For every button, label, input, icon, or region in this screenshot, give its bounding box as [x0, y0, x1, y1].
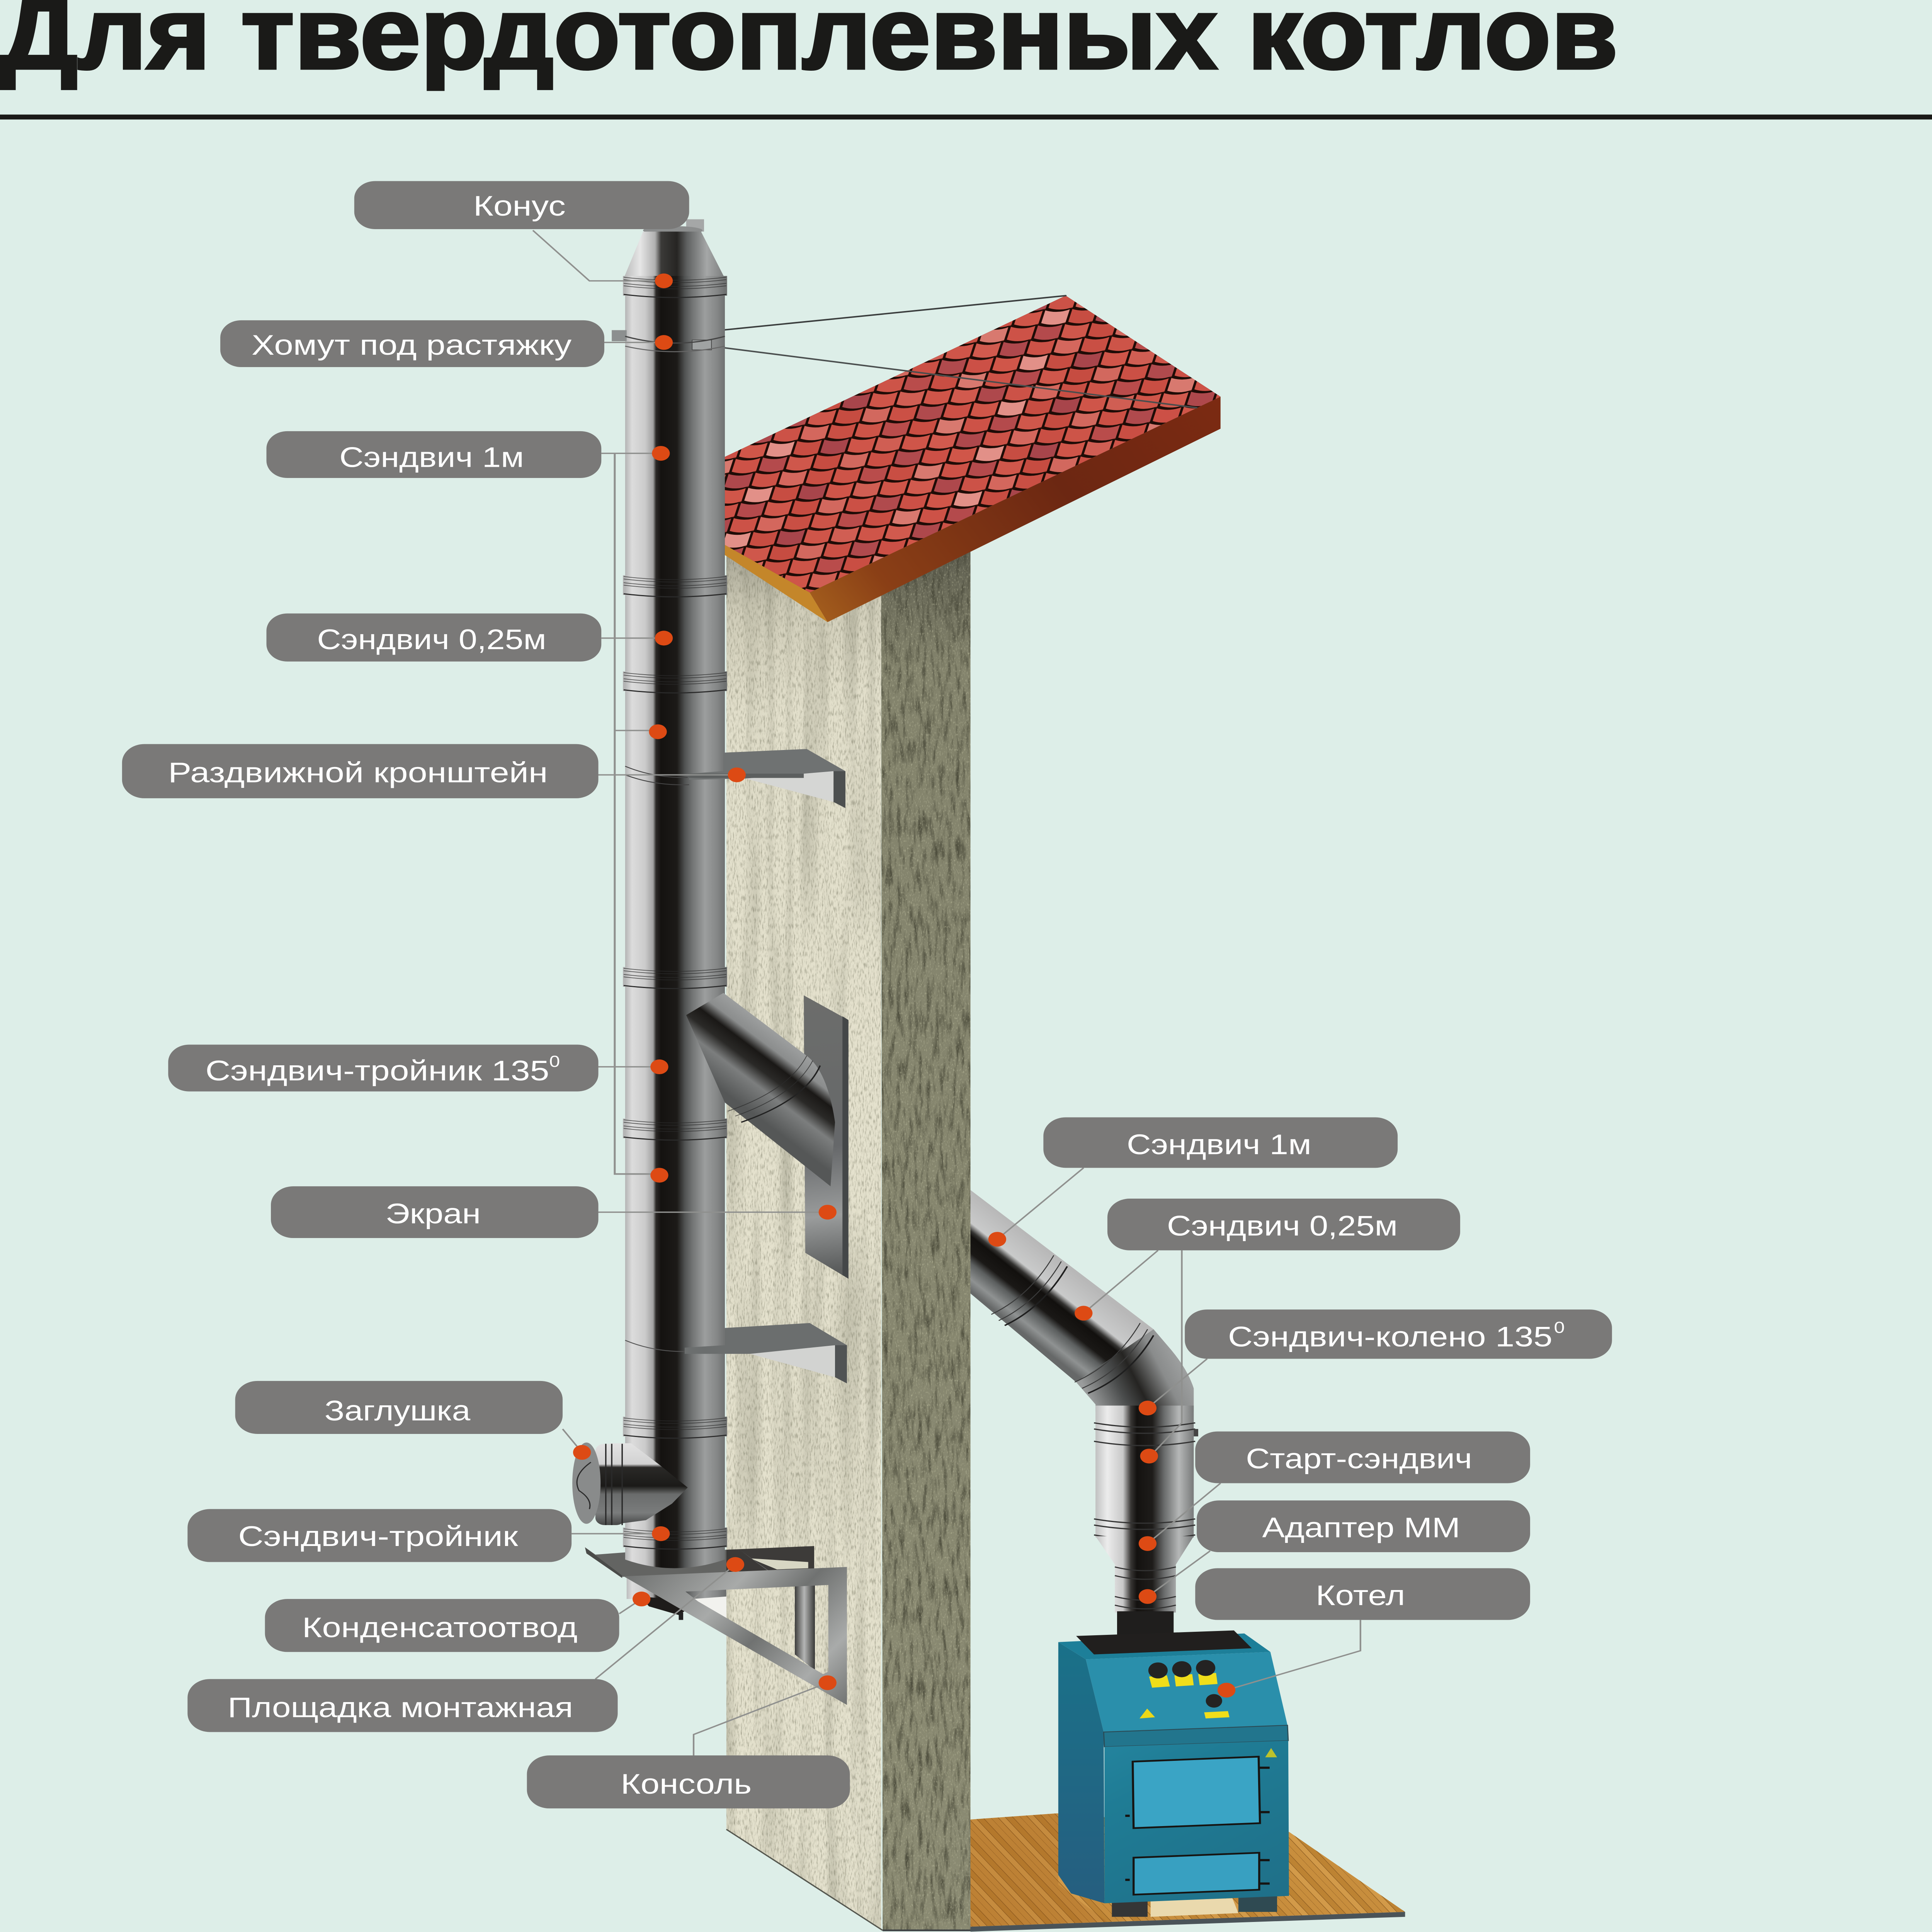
- label: Котел: [1195, 1568, 1530, 1620]
- side face: [1058, 1642, 1104, 1903]
- label: Заглушка: [235, 1381, 563, 1434]
- label: Старт-сэндвич: [1195, 1432, 1530, 1483]
- console: [624, 1567, 847, 1705]
- flue to boiler: [971, 1190, 1198, 1636]
- label: Хомут под растяжку: Хомут под растяжку: [252, 329, 572, 361]
- end cap tee branch: [572, 1442, 688, 1525]
- label: Сэндвич 1м: Сэндвич 1м: [339, 441, 524, 473]
- label: Экран: [271, 1186, 599, 1238]
- lower bracket collar: [625, 1340, 689, 1352]
- label: Хомут под растяжку: [220, 320, 604, 367]
- roof: [725, 296, 1221, 622]
- label: Раздвижной кронштейн: Раздвижной кронштейн: [168, 757, 548, 789]
- label: Сэндвич 1м right: Сэндвич 1м: [1127, 1129, 1311, 1160]
- label: Сэндвич 0,25м right: Сэндвич 0,25м: [1167, 1210, 1398, 1242]
- branch of tee 135: [686, 993, 835, 1186]
- yellow plates: [1149, 1673, 1230, 1718]
- control knobs: [1148, 1660, 1222, 1708]
- roof edge: [810, 397, 1221, 622]
- label: Конденсатоотвод: [265, 1599, 619, 1652]
- back plate of console: [726, 1546, 815, 1670]
- warning triangles: [1139, 1709, 1277, 1757]
- label: Сэндвич-тройник 135°: 0: [549, 1052, 560, 1070]
- label: Сэндвич-тройник 135°: [168, 1045, 599, 1092]
- label: Раздвижной кронштейн: [122, 744, 599, 798]
- ring joints: [623, 276, 727, 1549]
- label: Экран: Экран: [386, 1198, 481, 1230]
- lower tube: [1115, 1563, 1176, 1612]
- drain collar: [627, 1571, 726, 1624]
- upper panel: [1086, 1652, 1287, 1732]
- diagonal rings: [991, 1255, 1061, 1321]
- black stub: [1117, 1611, 1173, 1636]
- lower front: [1104, 1741, 1289, 1903]
- wall screen plate: [804, 995, 849, 1279]
- adapter: [1095, 1536, 1194, 1565]
- feet: [1112, 1897, 1148, 1917]
- cone: [624, 231, 725, 279]
- roof end: [722, 543, 828, 622]
- label: Старт-сэндвич: Старт-сэндвич: [1246, 1443, 1472, 1475]
- rim: [595, 1444, 625, 1525]
- floor: [971, 1813, 1405, 1932]
- mounting platform: [585, 1547, 774, 1578]
- band: [1104, 1725, 1288, 1747]
- label: Консоль: Консоль: [621, 1768, 752, 1800]
- label: Сэндвич 1м: [267, 431, 601, 478]
- elbow: [1076, 1329, 1194, 1412]
- label: Конус: [354, 181, 689, 229]
- roof tiles: [725, 296, 1221, 593]
- pipe body: [625, 279, 725, 1568]
- cap: [572, 1442, 600, 1524]
- door handles: [1125, 1768, 1270, 1884]
- wall bracket upper: [688, 749, 845, 808]
- label: Котел: Котел: [1316, 1580, 1405, 1611]
- label: Площадка монтажная: [187, 1679, 618, 1732]
- label: Адаптер ММ: [1197, 1500, 1530, 1552]
- label: Сэндвич 0,25м right: [1107, 1199, 1460, 1250]
- wall bracket lower: [685, 1323, 847, 1383]
- stay wires: [711, 296, 1197, 408]
- label: Сэндвич-колено 135°: Сэндвич-колено 135: [1228, 1321, 1553, 1353]
- title rule: [0, 114, 1932, 119]
- vertical section: [1095, 1406, 1194, 1537]
- branch: [609, 1443, 688, 1525]
- lower door: [1134, 1853, 1259, 1895]
- top: [1058, 1633, 1270, 1659]
- label: Конденсатоотвод: Конденсатоотвод: [302, 1612, 578, 1643]
- leader lines: [533, 230, 1361, 1755]
- label: Консоль: [527, 1755, 850, 1808]
- upper door: [1133, 1757, 1260, 1828]
- main pipe: [612, 219, 727, 1568]
- label: Сэндвич 1м right: [1043, 1117, 1398, 1168]
- label: Сэндвич-колено 135°: 0: [1554, 1318, 1565, 1337]
- label: Сэндвич-тройник: Сэндвич-тройник: [238, 1520, 518, 1552]
- label: Сэндвич-тройник: [187, 1509, 571, 1562]
- label: Сэндвич-колено 135°: [1185, 1310, 1612, 1359]
- concrete wall: [726, 542, 971, 1930]
- cone cap: [643, 219, 704, 235]
- top plate: [1076, 1630, 1252, 1655]
- label: Сэндвич-тройник 135°: Сэндвич-тройник 135: [206, 1055, 549, 1087]
- label: Площадка монтажная: Площадка монтажная: [228, 1692, 573, 1723]
- bracket collar: [625, 766, 689, 785]
- label: Конус: Конус: [473, 190, 566, 222]
- label: Адаптер ММ: Адаптер ММ: [1262, 1512, 1460, 1544]
- boiler: [1058, 1630, 1289, 1917]
- marker dots: [573, 274, 1235, 1697]
- label: Заглушка: Заглушка: [325, 1395, 471, 1427]
- label: Сэндвич 0,25м: [267, 614, 601, 662]
- hose clamp: [612, 330, 725, 352]
- label: Сэндвич 0,25м: Сэндвич 0,25м: [317, 624, 546, 655]
- diagonal section: [971, 1190, 1153, 1382]
